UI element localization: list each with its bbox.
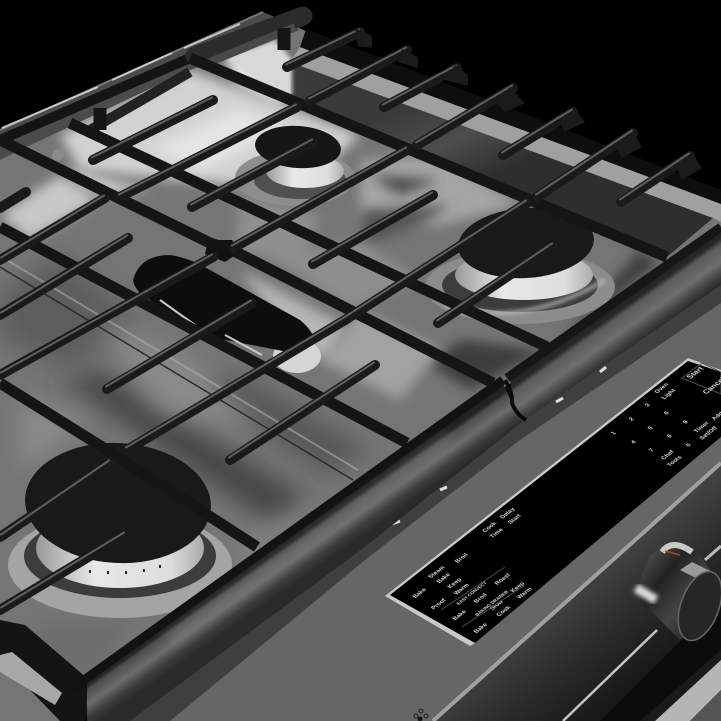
grate: long bars	[0, 48, 633, 537]
front rail: left section	[70, 380, 525, 721]
number keypad: 0	[685, 443, 694, 448]
back reflection	[225, 40, 292, 100]
number keypad: 8	[666, 434, 675, 439]
panel: stainless control fascia	[130, 285, 721, 721]
mode key labels: Bake	[452, 609, 469, 621]
silver rear strip	[290, 47, 721, 222]
knob body	[636, 542, 717, 640]
number keypad: Chef	[660, 450, 676, 461]
burner ports	[90, 565, 160, 574]
silver lower ring	[636, 588, 656, 600]
number keypad: Timer	[693, 421, 712, 434]
trim lines	[0, 267, 353, 480]
support posts	[100, 28, 284, 130]
mode key labels: Start	[507, 514, 523, 525]
clip tabs	[392, 367, 606, 524]
panel: rear left frame	[0, 12, 303, 161]
number keypad: Tools	[666, 455, 684, 468]
mode key labels: Warm	[516, 587, 534, 600]
rail joint	[505, 380, 526, 420]
red indicator	[665, 551, 680, 555]
mode key labels: Keep	[447, 577, 464, 589]
mode key labels: Roast	[494, 573, 512, 586]
number keypad: 9	[682, 420, 691, 425]
start and cancel keys: Start	[684, 365, 706, 380]
grate: short prongs	[0, 28, 702, 610]
number keypad: 1	[610, 431, 619, 436]
grate: cross frame bars	[0, 58, 667, 547]
mode key labels: Bake	[473, 622, 490, 634]
number keypad: 4	[630, 440, 639, 445]
surface reflections and shadows	[0, 49, 660, 556]
dark rear steel panel	[290, 62, 713, 257]
black rear ledge	[300, 18, 721, 204]
burner: right	[425, 203, 615, 324]
panel bezel	[385, 358, 721, 646]
control panel display	[385, 358, 721, 646]
burner: center	[133, 255, 321, 373]
mode key labels: Bake	[412, 587, 429, 599]
panel glass	[390, 361, 721, 643]
number keypad: Set/Off	[699, 426, 719, 441]
underside ledge	[130, 285, 721, 721]
lower fascia and door	[433, 463, 721, 721]
mode key labels: Slow	[489, 599, 506, 611]
burner: front	[8, 438, 232, 618]
number keypad: Light	[661, 389, 678, 400]
mode key labels: Bake	[436, 572, 453, 584]
number keypad: 7	[648, 448, 657, 453]
front rail: right section	[505, 227, 721, 420]
number keypad: 2	[628, 417, 637, 422]
mode key labels: Keep	[510, 581, 527, 593]
mode key labels: Time	[489, 527, 506, 539]
grate feet	[355, 28, 702, 180]
mode key labels	[412, 507, 534, 634]
mode key labels: Proof	[430, 598, 448, 611]
start and cancel keys	[682, 363, 721, 396]
control icon dots	[414, 709, 428, 721]
control knob	[636, 542, 721, 646]
mode key labels: Warm	[453, 583, 471, 596]
mode key labels: Delay	[499, 507, 518, 520]
center junction	[205, 240, 240, 262]
number keypad: 3	[644, 403, 653, 408]
mode key labels: EASY CONVECT	[455, 581, 488, 606]
mode key labels: Cook	[496, 605, 513, 618]
mode key labels: Cook	[482, 521, 499, 534]
number keypad	[610, 382, 721, 468]
mode key labels: BAKING DRAWER	[474, 589, 510, 617]
mode key labels: Broil	[454, 553, 470, 564]
number keypad: 5	[647, 426, 656, 431]
silver top ring	[662, 545, 692, 552]
mode key labels: Broil	[473, 593, 489, 604]
knob face	[670, 566, 721, 646]
number keypad: 6	[663, 411, 672, 416]
mode key labels: Steam	[427, 566, 447, 579]
number keypad: Oven	[654, 382, 671, 395]
knob grip	[680, 562, 716, 584]
grate: front left corner foot	[0, 620, 95, 721]
burner: back	[235, 123, 355, 206]
